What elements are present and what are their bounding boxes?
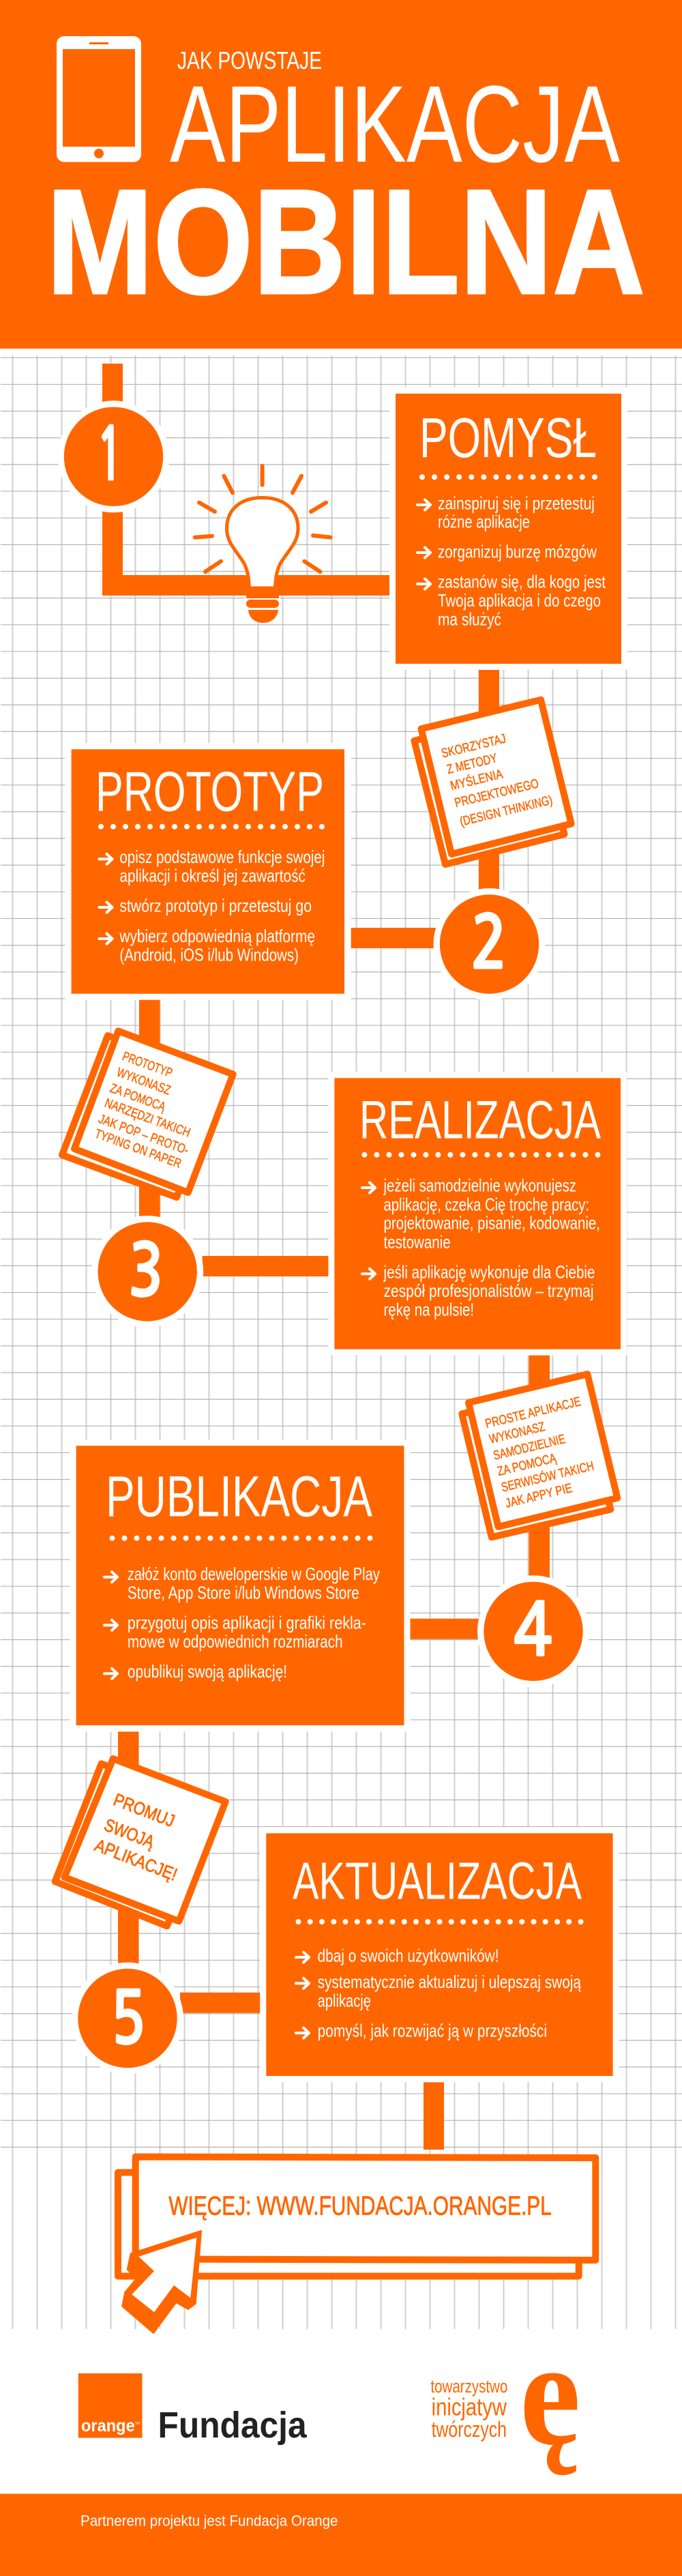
- panel: REALIZACJA: jeżeli samodzielnie wykonujesz: [383, 1175, 576, 1196]
- panel: PROTOTYP: [72, 749, 344, 994]
- connector: idea to step 2: [479, 670, 499, 890]
- panel: REALIZACJA: jeśli aplikację wykonuje dla Ciebie: [383, 1261, 595, 1282]
- panel: PROTOTYP: wybierz odpowiednią platformę: [119, 926, 315, 946]
- connector: step 2 to prototype: [351, 928, 436, 948]
- panel: AKTUALIZACJA: systematycznie aktualizuj i ulepszaj swoją: [318, 1972, 581, 1992]
- connector: realization to step 4: [529, 1356, 550, 1579]
- note: prototyping tools: JAK POP – PROTO-: [97, 1112, 190, 1158]
- note: prototyping tools: PROTOTYP: [121, 1049, 174, 1081]
- note: simple apps: ZA POMOCĄ: [496, 1451, 558, 1479]
- title: JAK POWSTAJE: [177, 46, 322, 74]
- panel: AKTUALIZACJA: dbaj o swoich użytkowników!: [318, 1946, 499, 1966]
- panel: REALIZACJA: [334, 1078, 621, 1349]
- note: simple apps: [462, 1374, 617, 1537]
- panel: AKTUALIZACJA: aplikację: [318, 1991, 371, 2011]
- footer: [0, 2494, 682, 2576]
- panel: PUBLIKACJA: załóż konto deweloperskie w Google Play: [128, 1564, 380, 1584]
- note: design thinking: PROJEKTOWEGO: [454, 776, 540, 810]
- note: simple apps: WYKONASZ: [488, 1420, 546, 1447]
- step 4 number: [477, 1575, 589, 1687]
- note: simple apps: SAMODZIELNIE: [492, 1432, 567, 1463]
- step 2 number: 2: [471, 907, 507, 979]
- button: more information: [118, 2157, 595, 2276]
- note: design thinking: [414, 700, 572, 864]
- step 5 number: [72, 1962, 183, 2074]
- connector: publication to step 5: [118, 1731, 139, 1963]
- panel: POMYSŁ: zainspiruj się i przetestuj: [438, 493, 595, 514]
- step 5 number: 5: [110, 1983, 146, 2055]
- panel: PUBLIKACJA: PUBLIKACJA: [106, 1464, 372, 1528]
- panel halo: realization: [328, 1072, 627, 1356]
- panel: POMYSŁ: różne aplikacje: [438, 511, 530, 531]
- connector: start to idea panel: [102, 364, 389, 596]
- button: more information: WIĘCEJ: WWW.FUNDACJA.ORANGE.PL: [168, 2192, 552, 2221]
- panel: REALIZACJA: REALIZACJA: [359, 1089, 601, 1150]
- panel: POMYSŁ: POMYSŁ: [419, 406, 597, 469]
- note: promote: SWOJĄ: [102, 1815, 158, 1852]
- panel: PROTOTYP: PROTOTYP: [95, 759, 324, 823]
- note: prototyping tools: NARZĘDZI TAKICH: [103, 1096, 192, 1141]
- panel: REALIZACJA: testowanie: [383, 1231, 451, 1252]
- note: prototyping tools: [62, 1031, 233, 1197]
- logo: Fundacja Orange: TM: [135, 2422, 140, 2426]
- logo: Towarzystwo Inicjatyw Twórczych: ę: [520, 2310, 580, 2476]
- note: design thinking: Z METODY: [445, 751, 499, 777]
- panel: PUBLIKACJA: opublikuj swoją aplikację!: [128, 1661, 287, 1682]
- connector: step 4 to publication: [410, 1619, 480, 1639]
- note: promote: PROMUJ: [110, 1789, 177, 1831]
- note: promote: APLIKACJĘ!: [92, 1834, 180, 1885]
- logo: Fundacja Orange: orange: [81, 2416, 135, 2435]
- step 1 number: [57, 400, 169, 512]
- logo: Towarzystwo Inicjatyw Twórczych: [430, 2310, 580, 2476]
- panel: AKTUALIZACJA: [266, 1833, 613, 2076]
- note: design thinking: MYŚLENIA: [449, 766, 505, 793]
- title: [46, 46, 645, 325]
- logo: Towarzystwo Inicjatyw Twórczych: twórczych: [432, 2417, 507, 2442]
- icon: mouse cursor: [122, 2231, 201, 2333]
- panel: REALIZACJA: rękę na pulsie!: [383, 1299, 474, 1319]
- panel halo: idea: [389, 387, 627, 670]
- logo: Fundacja Orange: [78, 2373, 307, 2446]
- panel: PUBLIKACJA: Store, App Store i/lub Windows Store: [128, 1582, 359, 1602]
- note: prototyping tools: TYPING ON PAPER: [93, 1127, 183, 1171]
- panel: AKTUALIZACJA: pomyśl, jak rozwijać ją w przyszłości: [318, 2021, 547, 2041]
- panel: POMYSŁ: zorganizuj burzę mózgów: [438, 541, 597, 561]
- panel: POMYSŁ: [396, 394, 621, 664]
- connector: step 3 to realization: [203, 1256, 329, 1276]
- step 2 number: [434, 888, 546, 1000]
- logo: Towarzystwo Inicjatyw Twórczych: towarzystwo: [430, 2376, 507, 2397]
- panel: POMYSŁ: Twoja aplikacja i do czego: [438, 590, 601, 611]
- panel: PUBLIKACJA: [76, 1446, 404, 1725]
- panel: PUBLIKACJA: przygotuj opis aplikacji i grafiki rekla-: [128, 1612, 366, 1633]
- panel: PROTOTYP: aplikacji i określ jej zawartość: [119, 865, 306, 886]
- panel: PUBLIKACJA: mowe w odpowiednich rozmiarach: [128, 1631, 343, 1652]
- step 1 number: 1: [96, 419, 123, 491]
- step 3 number: 3: [128, 1235, 164, 1307]
- panel: PROTOTYP: opisz podstawowe funkcje swojej: [119, 847, 325, 867]
- icon: smartphone: [57, 36, 141, 162]
- logo: Fundacja Orange: Fundacja: [158, 2405, 307, 2446]
- panel: POMYSŁ: ma służyć: [438, 609, 501, 630]
- note: prototyping tools: ZA POMOCĄ: [108, 1081, 168, 1115]
- step 4 number: 4: [513, 1595, 552, 1667]
- panel: REALIZACJA: zespół profesjonalistów – trzymaj: [383, 1280, 593, 1301]
- logo: Towarzystwo Inicjatyw Twórczych: inicjatyw: [432, 2393, 507, 2421]
- panel: PROTOTYP: (Android, iOS i/lub Windows): [119, 944, 299, 965]
- connector: step 5 to update: [180, 1993, 260, 2013]
- note: prototyping tools: WYKONASZ: [115, 1066, 173, 1098]
- note: simple apps: SERWISÓW TAKICH: [500, 1459, 595, 1495]
- panel halo: prototype: [65, 743, 351, 1000]
- panel: REALIZACJA: projektowanie, pisanie, kodowanie,: [383, 1213, 600, 1233]
- connector: prototype to step 3: [139, 1000, 160, 1217]
- connector: update to link button: [424, 2082, 444, 2150]
- panel: PROTOTYP: stwórz prototyp i przetestuj go: [119, 896, 312, 916]
- panel: AKTUALIZACJA: AKTUALIZACJA: [293, 1852, 582, 1910]
- header band: [0, 0, 682, 349]
- note: design thinking: SKORZYSTAJ: [440, 732, 507, 761]
- panel: REALIZACJA: aplikację, czeka Cię trochę pracy:: [383, 1194, 589, 1214]
- note: design thinking: (DESIGN THINKING): [458, 793, 554, 830]
- step 3 number: [91, 1216, 203, 1328]
- icon: light bulb: [195, 466, 331, 623]
- panel halo: publication: [70, 1439, 410, 1731]
- panel: POMYSŁ: zastanów się, dla kogo jest: [438, 572, 606, 592]
- note: simple apps: JAK APPY PIE: [504, 1481, 574, 1511]
- note: promote: [55, 1759, 226, 1926]
- panel halo: update: [260, 1827, 619, 2082]
- footer: Partnerem projektu jest Fundacja Orange: [80, 2512, 338, 2529]
- note: simple apps: PROSTE APLIKACJE: [484, 1394, 582, 1431]
